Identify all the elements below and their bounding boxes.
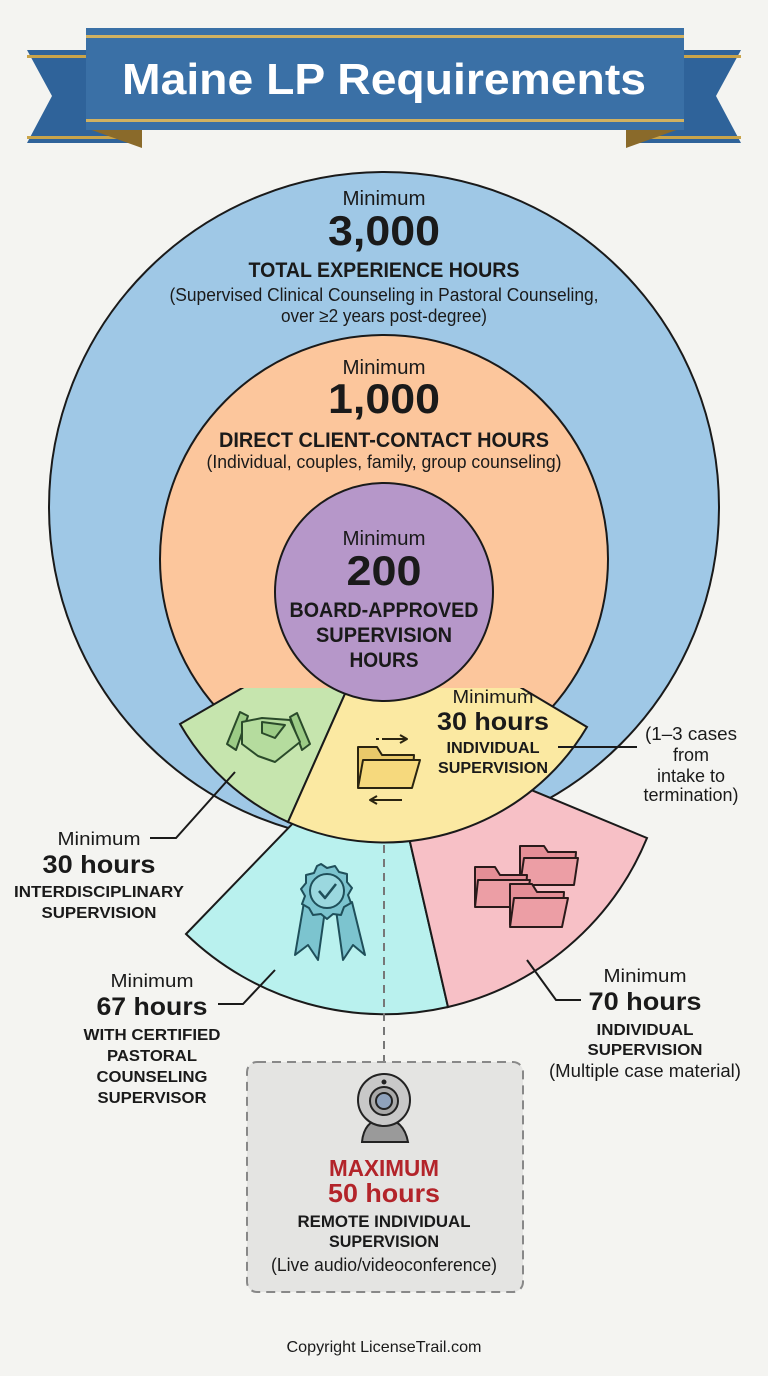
circle: board-approved supervision [275, 483, 493, 701]
box: remote supervision: REMOTE INDIVIDUAL [298, 1212, 470, 1231]
wedge: 30 hours individual (yellow): Minimum [452, 687, 534, 707]
circle: direct client contact: 1,000 [328, 375, 440, 422]
callout: 30 hours interdisciplinary [14, 772, 235, 922]
icon: handshake [227, 712, 310, 762]
callout: 67 hours certified: 67 hours [96, 993, 208, 1021]
callout: 1-3 cases [558, 724, 739, 805]
box: remote supervision: 50 hours [328, 1178, 440, 1208]
callout: 67 hours certified: Minimum [110, 971, 194, 991]
circle: direct client contact: (Individual, couples, family, group counseling) [206, 452, 562, 472]
callout: 70 hours individual: 70 hours [588, 988, 702, 1016]
circle: total experience: TOTAL EXPERIENCE HOURS [248, 259, 520, 282]
wedge: interdisciplinary (green) [178, 688, 344, 824]
dashed connector [383, 845, 385, 1062]
callout: 70 hours individual: Minimum [604, 966, 686, 986]
circle: direct client contact: DIRECT CLIENT-CONTACT HOURS [219, 429, 549, 452]
circle: direct client contact [160, 335, 608, 783]
callout: 70 hours individual: (Multiple case material) [549, 1061, 741, 1081]
circle: total experience: (Supervised Clinical Counseling in Pastoral Counseling, [170, 285, 598, 305]
icon: multiple folders [475, 846, 578, 927]
circle: total experience: Minimum [342, 188, 426, 210]
icon: folder with arrows [358, 735, 420, 804]
box: remote supervision [247, 1062, 523, 1292]
wedge: 30 hours individual (yellow): INDIVIDUAL [446, 740, 540, 757]
circle: total experience: 3,000 [328, 207, 440, 254]
callout: 70 hours individual: SUPERVISION [588, 1042, 702, 1059]
callout: 67 hours certified: PASTORAL [107, 1048, 197, 1065]
circle: board-approved supervision: 200 [346, 547, 422, 594]
wedge: 30 hours individual (yellow) [286, 688, 588, 844]
callout: 67 hours certified [84, 970, 275, 1107]
icon: award ribbon [295, 864, 365, 960]
footer copyright: Copyright LicenseTrail.com [286, 1339, 482, 1356]
circle: board-approved supervision: BOARD-APPROVED [290, 599, 478, 622]
callout: 1-3 cases: (1–3 cases [645, 724, 737, 744]
circle: total experience: over ≥2 years post-degree) [281, 306, 487, 326]
callout: 1-3 cases: from [673, 745, 709, 765]
box: remote supervision: MAXIMUM [329, 1155, 439, 1181]
wedge: 30 hours individual (yellow): SUPERVISION [438, 760, 548, 777]
callout: 70 hours individual [527, 960, 741, 1081]
title: Maine LP Requirements [122, 55, 646, 104]
callout: 67 hours certified: WITH CERTIFIED [84, 1027, 220, 1044]
circle: board-approved supervision: SUPERVISION [316, 624, 452, 647]
callout: 70 hours individual: INDIVIDUAL [596, 1022, 694, 1039]
circle: board-approved supervision: Minimum [342, 528, 426, 550]
circle: total experience [49, 172, 719, 842]
icon: webcam [358, 1074, 410, 1142]
callout: 30 hours interdisciplinary: 30 hours [42, 851, 156, 879]
title banner [27, 28, 741, 148]
callout: 30 hours interdisciplinary: INTERDISCIPLINARY [14, 884, 184, 901]
circle: board-approved supervision: HOURS [350, 649, 418, 672]
wedge: 67 hours certified pastoral (cyan) [186, 729, 448, 1014]
box: remote supervision: (Live audio/videoconference) [271, 1255, 497, 1275]
box: remote supervision: SUPERVISION [329, 1232, 439, 1251]
callout: 30 hours interdisciplinary: Minimum [58, 829, 140, 849]
wedge: 70 hours individual (pink) [384, 729, 647, 1007]
wedge: 30 hours individual (yellow): 30 hours [437, 708, 549, 736]
callout: 67 hours certified: COUNSELING [96, 1069, 208, 1086]
callout: 67 hours certified: SUPERVISOR [98, 1090, 207, 1107]
callout: 1-3 cases: termination) [643, 785, 739, 805]
callout: 30 hours interdisciplinary: SUPERVISION [42, 905, 156, 922]
circle: direct client contact: Minimum [342, 357, 426, 379]
callout: 1-3 cases: intake to [657, 766, 725, 786]
